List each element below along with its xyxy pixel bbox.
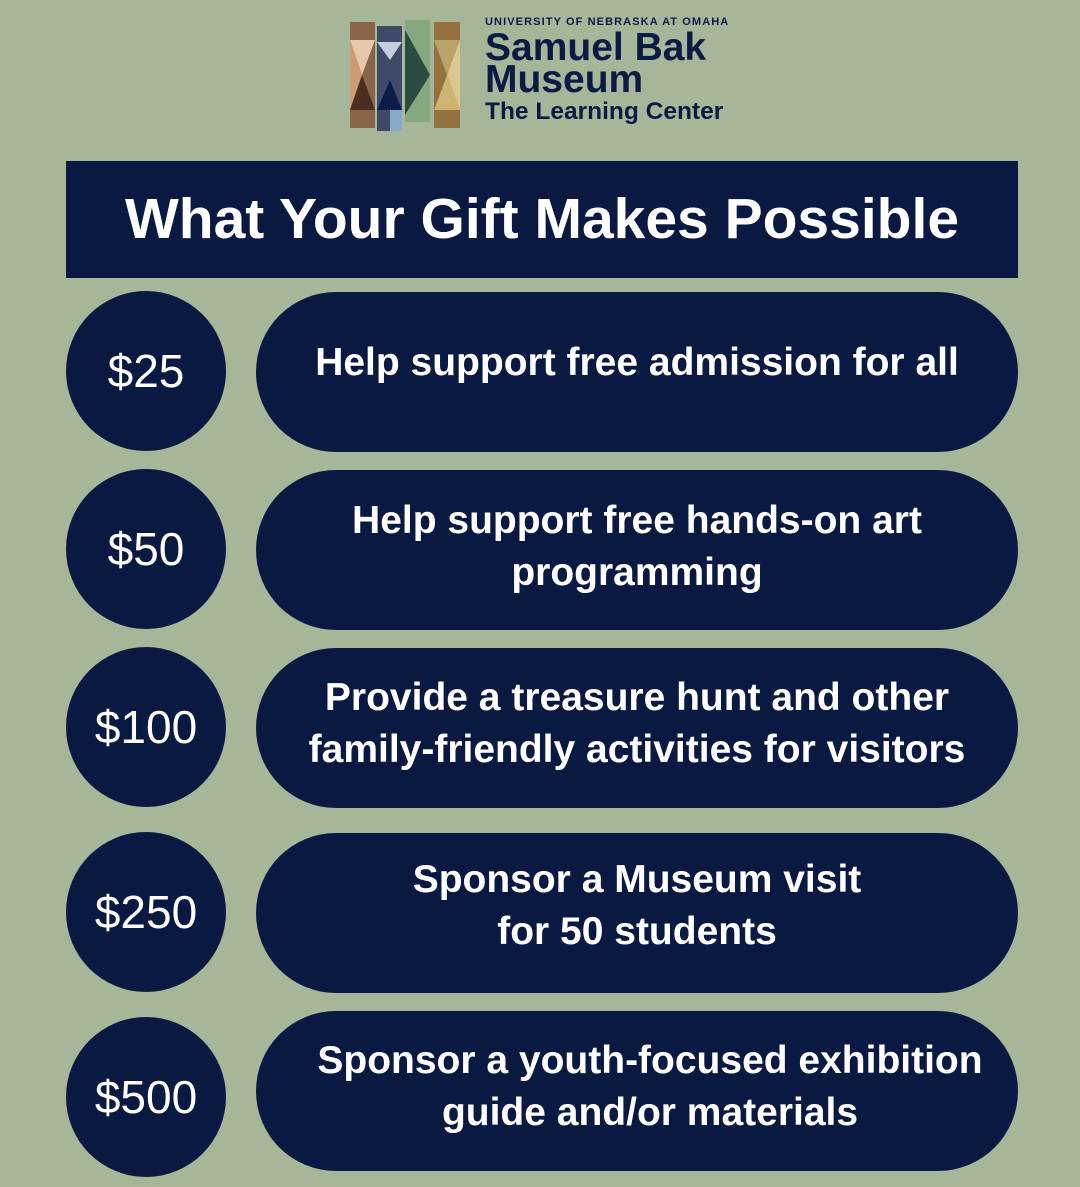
pill text: Help support free hands-on art	[352, 499, 922, 542]
amount circle	[66, 469, 226, 629]
text: logo wordmark: Museum	[485, 58, 643, 101]
amount circle: $25	[108, 345, 184, 397]
title banner	[66, 161, 1018, 278]
pill text: Sponsor a youth-focused exhibition	[317, 1039, 983, 1082]
amount circle: $50	[108, 523, 184, 575]
amount circle	[66, 647, 226, 807]
row: $50	[66, 469, 1018, 630]
text: logo wordmark: UNIVERSITY OF NEBRASKA AT OMAHA	[485, 16, 729, 28]
amount circle	[66, 832, 226, 992]
pill text	[256, 833, 1018, 993]
row: $500	[66, 1011, 1018, 1177]
amount circle	[66, 1017, 226, 1177]
pill text: guide and/or materials	[442, 1091, 858, 1134]
row: $25	[66, 291, 1018, 452]
pill text	[256, 292, 1018, 452]
pill text	[256, 470, 1018, 630]
text: logo wordmark	[485, 16, 729, 125]
pill text	[256, 1011, 1018, 1171]
pill text: programming	[511, 551, 763, 594]
pill text: Help support free admission for all	[315, 341, 959, 384]
title banner: What Your Gift Makes Possible	[125, 187, 959, 251]
amount circle	[66, 291, 226, 451]
text: logo wordmark: Samuel Bak	[485, 26, 706, 69]
pill text: for 50 students	[497, 910, 777, 953]
pill text	[256, 648, 1018, 808]
amount circle: $500	[95, 1071, 197, 1123]
amount circle: $250	[95, 886, 197, 938]
logo	[350, 16, 729, 131]
pill text: family-friendly activities for visitors	[309, 728, 965, 771]
text: logo wordmark: The Learning Center	[485, 98, 723, 125]
row: $100	[66, 647, 1018, 808]
row: $250	[66, 832, 1018, 993]
icon: logo mark	[350, 20, 460, 131]
pill text: Sponsor a Museum visit	[413, 858, 861, 901]
pill text: Provide a treasure hunt and other	[325, 676, 949, 719]
amount circle: $100	[95, 701, 197, 753]
